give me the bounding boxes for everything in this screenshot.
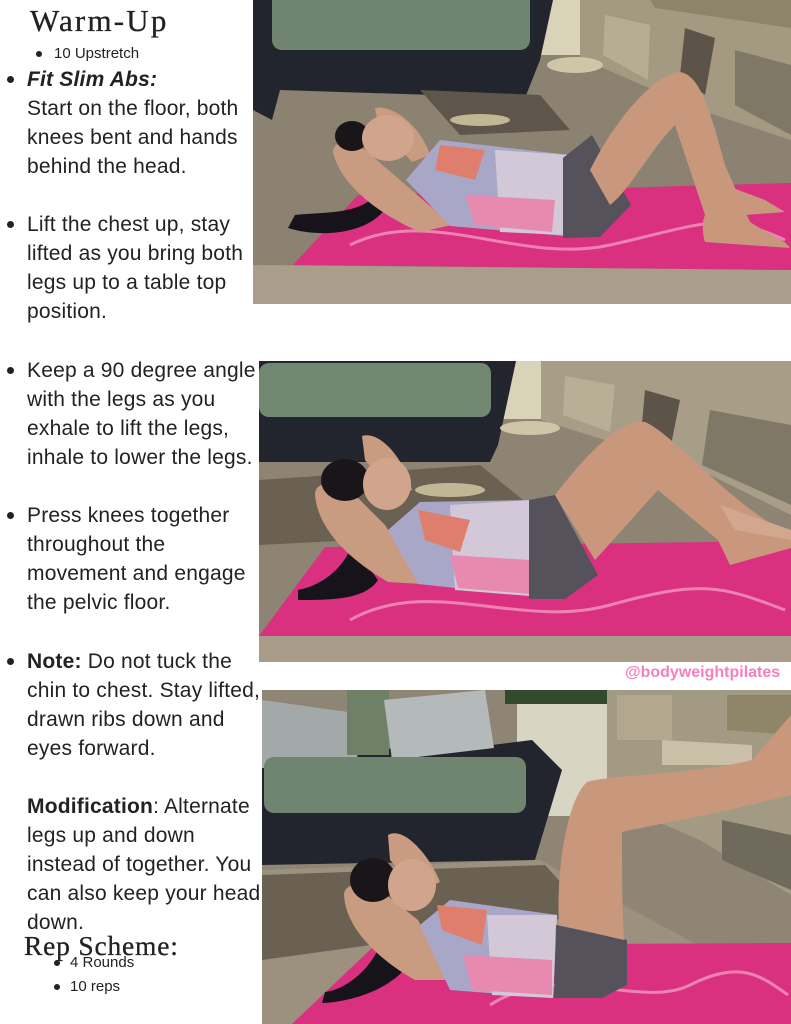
step: lift the chest [7,213,243,323]
step: note: eyes forward. [27,737,156,760]
step: keep 90 degree angle [7,359,256,469]
step: press knees: throughout the [27,533,165,556]
step: keep 90 degree angle: Keep a 90 degree angle [27,359,256,382]
modification text: Modification: Alternate [27,795,250,818]
step: press knees: the pelvic floor. [27,591,170,614]
step: lift the chest: lifted as you bring both [27,242,243,265]
photo 2: legs lifted, feet hovering [259,361,791,662]
step: keep 90 degree angle: with the legs as you [27,388,215,411]
step: press knees: movement and engage [27,562,246,585]
rep scheme list: 10 reps [70,978,120,995]
step: fit slim abs: knees bent and hands [27,126,238,149]
step: fit slim abs: Fit Slim Abs: [27,68,157,91]
step: fit slim abs [7,68,238,178]
heading: warm-up: Warm-Up [30,3,169,38]
warm-up list item: 10 Upstretch [54,45,139,62]
modification text: down. [27,911,84,934]
step: note: chin to chest. Stay lifted, [27,679,260,702]
step: fit slim abs: Start on the floor, both [27,97,238,120]
step: note [7,650,260,760]
step: note: drawn ribs down and [27,708,225,731]
step: lift the chest: position. [27,300,107,323]
step: keep 90 degree angle: exhale to lift the legs, [27,417,229,440]
modification text: instead of together. You [27,853,251,876]
photo 1: exercise start position [253,0,791,304]
step: lift the chest: legs up to a table top [27,271,226,294]
modification text [27,795,260,934]
step: keep 90 degree angle: inhale to lower the legs. [27,446,253,469]
handle credit: @bodyweightpilates [625,664,780,681]
modification text: can also keep your head [27,882,260,905]
step: press knees [7,504,246,614]
rep scheme list [54,954,134,995]
heading: rep scheme: Rep Scheme: [24,930,179,961]
step: fit slim abs: behind the head. [27,155,187,178]
step: lift the chest: Lift the chest up, stay [27,213,230,236]
step: note: Note: Do not tuck the [27,650,232,673]
modification text: legs up and down [27,824,195,847]
step: press knees: Press knees together [27,504,229,527]
rep scheme list: 4 Rounds [70,954,134,971]
photo 3: table top position [262,690,791,1024]
